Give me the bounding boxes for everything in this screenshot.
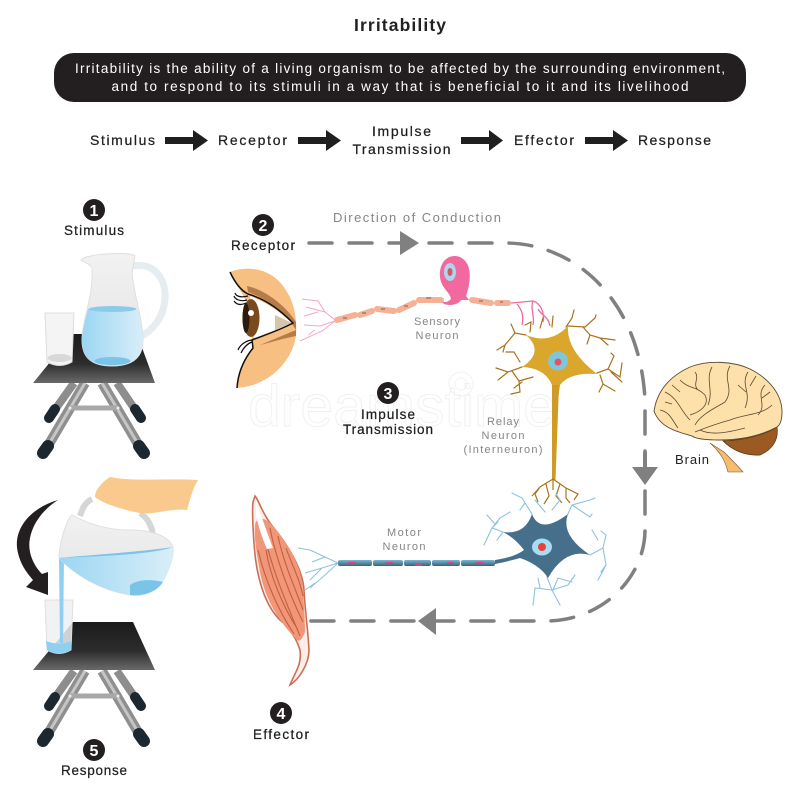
definition banner: [54, 53, 746, 102]
watermark: dreamstime: [248, 374, 556, 439]
sensory label: Neuron: [416, 330, 458, 342]
relay neuron: [464, 310, 622, 504]
curved pour arrow: [17, 500, 58, 595]
relay label: [464, 416, 542, 456]
eye: [230, 269, 296, 388]
step 4 effector heading: 4: [277, 706, 286, 723]
title: Irritability: [354, 15, 446, 35]
hand: [95, 477, 198, 513]
water stream: [59, 558, 64, 643]
step 2 receptor heading: [231, 214, 296, 253]
motor nucleus: [532, 538, 552, 556]
arrow bottom: [418, 608, 436, 635]
relay cell body: [522, 326, 597, 400]
eye outline: [230, 272, 293, 388]
brain: [654, 362, 782, 472]
relay axon: [552, 385, 559, 480]
step 4 effector heading: [253, 702, 310, 742]
stool top: [33, 334, 155, 383]
step 1 stimulus heading: 1: [90, 203, 99, 220]
definition banner: Irritability is the ability of a living organism to be affected by the surrounding environment,: [75, 61, 725, 76]
iris: [242, 299, 260, 337]
step 3 impulse transmission heading: Impulse: [361, 407, 415, 422]
motor label: Neuron: [382, 541, 426, 553]
stool front legs: [43, 671, 144, 741]
sensory nucleus: [444, 263, 456, 281]
stool back legs: [49, 383, 141, 418]
motor cell body: [495, 514, 590, 578]
upper tendon: [256, 500, 273, 549]
muscle: [253, 496, 309, 685]
step 2 receptor heading: Receptor: [231, 238, 296, 253]
pitcher body: [59, 515, 173, 595]
cerebrum: [654, 362, 782, 440]
flow step: Effector: Effector: [514, 132, 574, 148]
sensory axon spots: [343, 298, 503, 318]
muscle belly: [255, 519, 305, 641]
brain stem: [710, 443, 743, 472]
process flow: [90, 123, 711, 157]
flow step: Impulse Transmission: Transmission: [352, 141, 450, 157]
stool front legs: [43, 383, 144, 453]
sensory axon segments: [337, 300, 508, 320]
motor axon segments: [338, 560, 495, 566]
pitcher water: [82, 309, 143, 366]
stool with pitcher and glass: [33, 253, 165, 453]
sensory terminal: [511, 301, 550, 326]
sensory cell body: [440, 256, 470, 305]
glass: [45, 600, 73, 654]
flow step: Receptor: Receptor: [218, 132, 287, 148]
step 3 impulse transmission heading: Transmission: [343, 422, 433, 437]
stool back legs: [49, 671, 141, 706]
conduction path: [309, 210, 658, 635]
step 4 effector heading: Effector: [253, 727, 310, 742]
step 3 impulse transmission heading: 3: [384, 386, 393, 403]
relay label: Relay: [487, 416, 520, 428]
flow arrow 1: [165, 130, 208, 151]
muscle fibres: [258, 522, 303, 636]
sensory label: [414, 316, 460, 342]
lashes: [234, 293, 253, 353]
relay nucleus: [548, 352, 568, 370]
pitcher handle: [133, 265, 165, 336]
stool top: [33, 622, 155, 670]
dashed line: [309, 243, 645, 621]
pitcher body: [81, 253, 143, 366]
arrow down: [632, 452, 658, 485]
stool with pouring pitcher: [33, 477, 198, 741]
definition banner: and to respond to its stimuli in a way that is beneficial to it and its livelihood: [111, 79, 689, 94]
flow arrow 4: [585, 130, 628, 151]
motor axon spots: [348, 563, 483, 565]
step 1 stimulus heading: [64, 199, 124, 238]
step 5 response heading: 5: [90, 743, 99, 760]
step 5 response heading: Response: [61, 763, 127, 778]
flow step: Stimulus: Stimulus: [90, 132, 155, 148]
eye white: [250, 296, 292, 338]
pitcher water: [59, 547, 173, 596]
step 3 impulse transmission heading: [343, 382, 433, 437]
motor label: Motor: [387, 527, 421, 539]
flow arrow 2: [298, 130, 341, 151]
relay terminals: [532, 479, 578, 504]
sensory label: Sensory: [414, 316, 460, 328]
glass: [45, 313, 74, 366]
direction label: Direction of Conduction: [333, 210, 501, 225]
step 2 receptor heading: 2: [259, 218, 268, 235]
arrow top: [400, 231, 419, 255]
motor label: [382, 527, 426, 553]
flow arrow 3: [461, 130, 503, 151]
relay label: Neuron: [482, 430, 524, 442]
relay dendrites: [496, 310, 622, 394]
brain folds: [660, 366, 772, 433]
flow step: Response: Response: [638, 132, 711, 148]
motor neuron: [298, 493, 606, 605]
sensory neuron: [300, 256, 550, 342]
cerebellum: [723, 427, 777, 455]
pitcher handle: [80, 499, 153, 535]
relay label: (Interneuron): [464, 444, 542, 456]
muscle outline and tendon: [253, 496, 309, 685]
flow step: Impulse Transmission: [352, 123, 450, 157]
eyelid shadows: [247, 286, 296, 345]
motor dendrites: [484, 493, 606, 605]
motor terminal: [298, 548, 338, 590]
skin: [230, 269, 296, 388]
flow step: Impulse Transmission: Impulse: [372, 123, 431, 139]
step 1 stimulus heading: Stimulus: [64, 223, 124, 238]
brain label: Brain: [675, 452, 709, 467]
sensory dendrites: [300, 299, 335, 341]
step 5 response heading: [61, 739, 127, 778]
